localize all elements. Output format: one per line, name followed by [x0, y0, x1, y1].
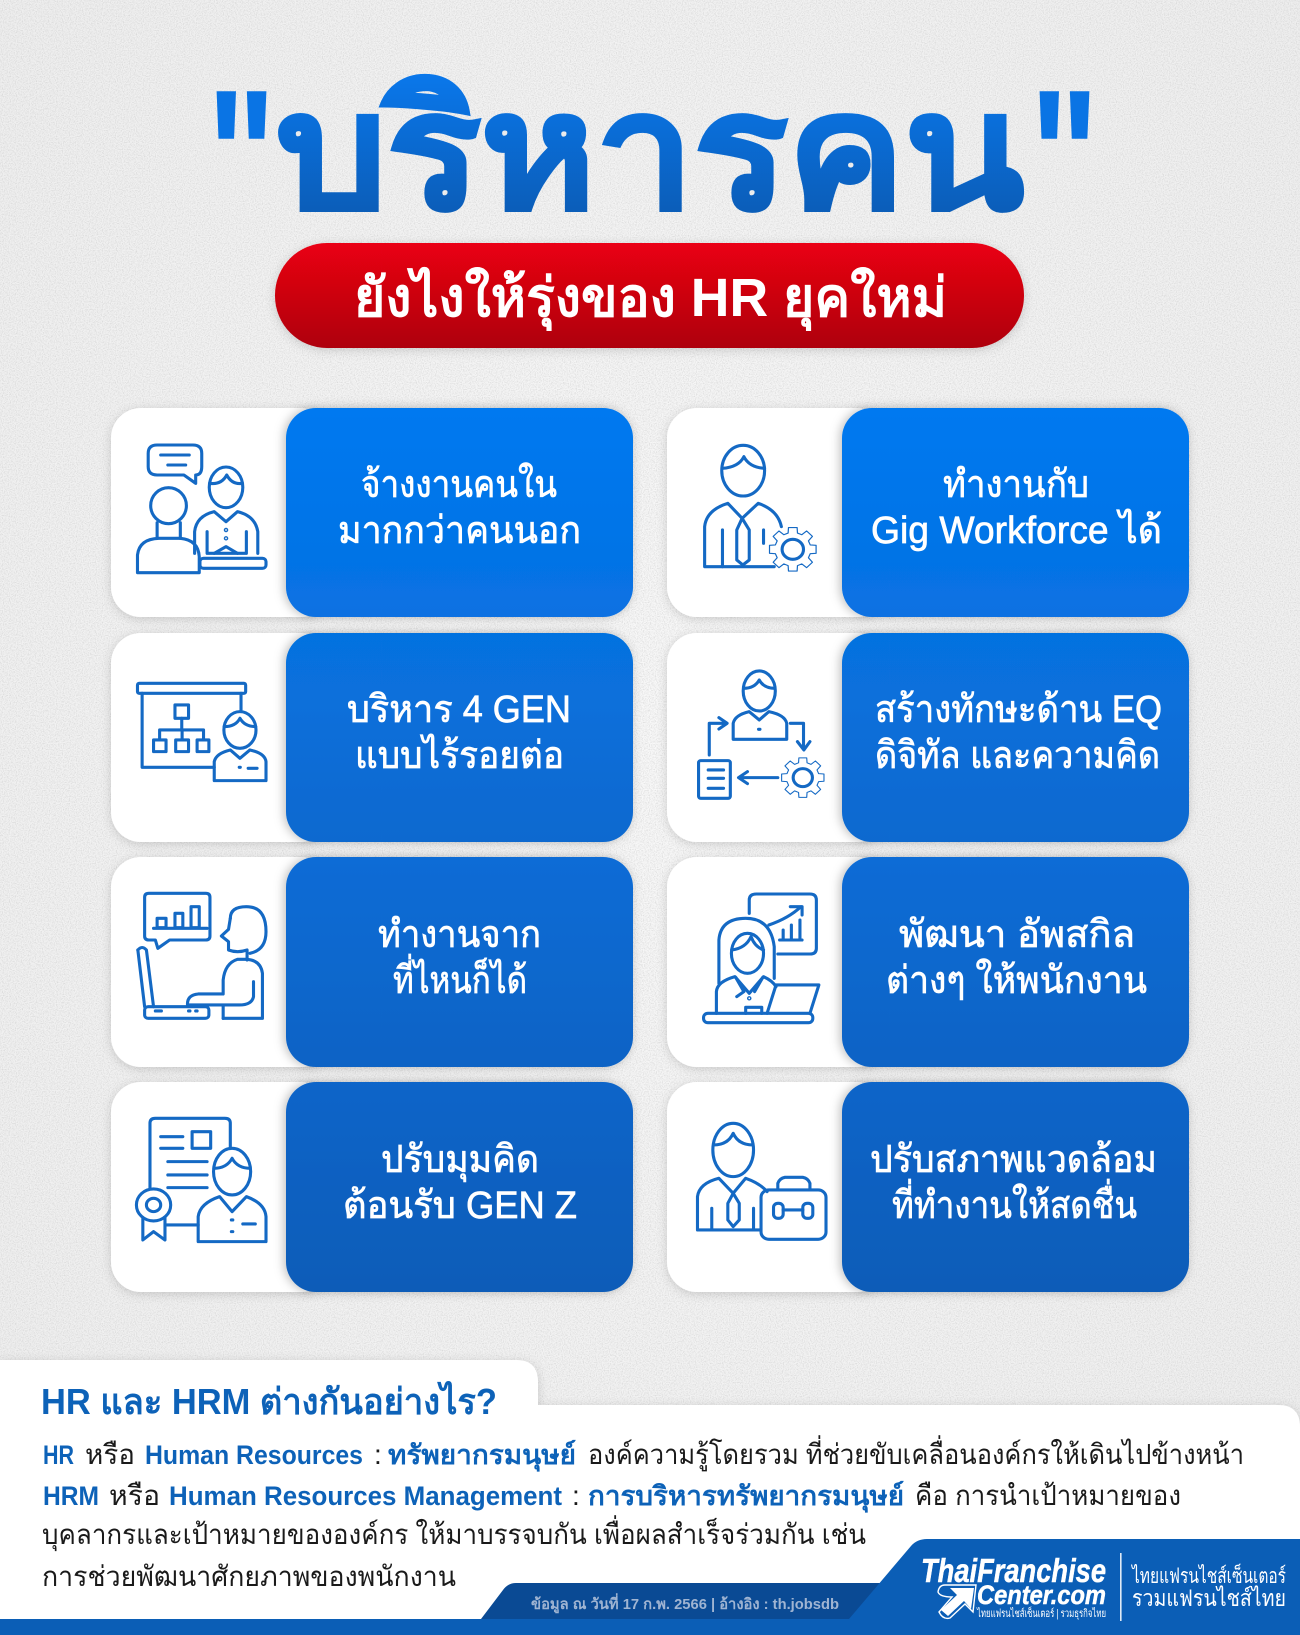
text block: definitions: HR — [43, 1440, 74, 1470]
logo: ThaiFranchise Center.com — [921, 1552, 1106, 1620]
panel: card 3 manage 4 gen — [111, 633, 633, 842]
icon: interview — [137, 445, 266, 573]
panel: card 2 gig workforce — [667, 408, 1189, 617]
panel: HR vs HRM explanation — [0, 1360, 1300, 1635]
text block: definitions: ทรัพยากรมนุษย์ — [388, 1439, 576, 1472]
card text: ต้อนรับ GEN Z — [343, 1185, 577, 1227]
card text: ทำงานกับ — [943, 464, 1089, 506]
text block: definitions: Human Resources — [145, 1440, 363, 1470]
panel: card 4 build skills — [667, 633, 1189, 842]
footer: source tag — [481, 1583, 882, 1619]
footer: source tag: ข้อมูล ณ วันที่ 17 ก.พ. 2566 | อ้างอิง : th.jobsdb — [531, 1593, 839, 1614]
icon: presenter with org chart — [137, 683, 266, 781]
icon: woman with growth chart — [704, 894, 819, 1023]
card text: บริหาร 4 GEN — [347, 689, 571, 731]
logo: ThaiFranchise Center.com: ไทยแฟรนไชส์เซ็นเตอร์ | รวมธุรกิจไทย — [976, 1606, 1106, 1620]
heading: HR vs HRM: HR และ HRM ต่างกันอย่างไร? — [41, 1380, 497, 1422]
panel: card 6 upskill — [667, 857, 1189, 1067]
card text — [378, 914, 541, 1002]
card text: แบบไร้รอยต่อ — [355, 734, 564, 777]
icon: logo arrow — [938, 1585, 976, 1618]
icon: remote worker with laptop — [138, 893, 266, 1018]
panel: card 1 hire internally — [111, 408, 633, 617]
text block: definitions: HRM — [43, 1481, 99, 1511]
card text: มากกว่าคนนอก — [338, 510, 581, 552]
card text: พัฒนา อัพสกิล — [899, 914, 1135, 956]
title: " — [207, 51, 276, 263]
icon: certificate with person — [136, 1118, 266, 1242]
card text — [347, 689, 571, 777]
subtitle pill: ยังไงให้รุ่งของ HR ยุคใหม่ — [354, 266, 947, 332]
card text: Gig Workforce ได้ — [871, 509, 1162, 552]
text block: definitions: การบริหารทรัพยากรมนุษย์ — [588, 1480, 904, 1513]
card text — [343, 1139, 577, 1227]
text block: definitions: Human Resources Management — [169, 1481, 562, 1511]
card text: จ้างงานคนใน — [361, 463, 557, 506]
icon: process cycle — [699, 671, 824, 798]
text block: definitions: คือ การนำเป้าหมายของ — [915, 1480, 1181, 1511]
text block: definitions: องค์ความรู้โดยรวม ที่ช่วยขับเคลื่อนองค์กรให้เดินไปข้างหน้า — [588, 1435, 1244, 1472]
card text: ปรับสภาพแวดล้อม — [870, 1139, 1157, 1181]
text block: definitions: การช่วยพัฒนาศักยภาพของพนักงาน — [42, 1561, 456, 1592]
card text — [886, 914, 1147, 1002]
card text — [871, 464, 1162, 552]
footer: brand band — [0, 1539, 1300, 1635]
text block: definitions: : — [374, 1439, 382, 1470]
icon: person with gear — [705, 445, 816, 571]
card text — [875, 689, 1162, 777]
text block: definitions: หรือ — [85, 1439, 135, 1470]
title: บริหารคน — [276, 62, 1024, 243]
text block: definitions: หรือ — [109, 1480, 160, 1511]
panel: card 7 mindset — [111, 1082, 633, 1292]
text block: definitions: : — [572, 1480, 580, 1511]
card text: ที่ไหนก็ได้ — [393, 954, 527, 1002]
card text — [338, 463, 581, 552]
panel: card 8 environment — [667, 1082, 1189, 1292]
title — [207, 51, 1099, 263]
card text: ดิจิทัล และความคิด — [875, 735, 1160, 777]
panel: card 5 work anywhere — [111, 857, 633, 1067]
title: " — [1030, 51, 1099, 263]
brand tagline — [1131, 1562, 1286, 1611]
subtitle pill — [275, 243, 1024, 348]
logo: ThaiFranchise Center.com: Center.com — [977, 1580, 1106, 1610]
text block: definitions — [42, 1435, 1244, 1592]
card text: สร้างทักษะด้าน EQ — [875, 689, 1162, 731]
card text — [870, 1139, 1157, 1227]
card text: ต่างๆ ให้พนักงาน — [886, 959, 1147, 1002]
divider — [1120, 1553, 1122, 1621]
logo: ThaiFranchise Center.com: ThaiFranchise — [921, 1552, 1106, 1589]
card text: ที่ทำงานให้สดชื่น — [892, 1179, 1137, 1227]
icon: businessman with briefcase — [697, 1123, 826, 1239]
text block: definitions: บุคลากรและเป้าหมายขององค์กร ให้มาบรรจบกัน เพื่อผลสำเร็จร่วมกัน เช่น — [42, 1515, 866, 1552]
card text: ปรับมุมคิด — [381, 1139, 539, 1182]
card text: ทำงานจาก — [378, 914, 541, 956]
